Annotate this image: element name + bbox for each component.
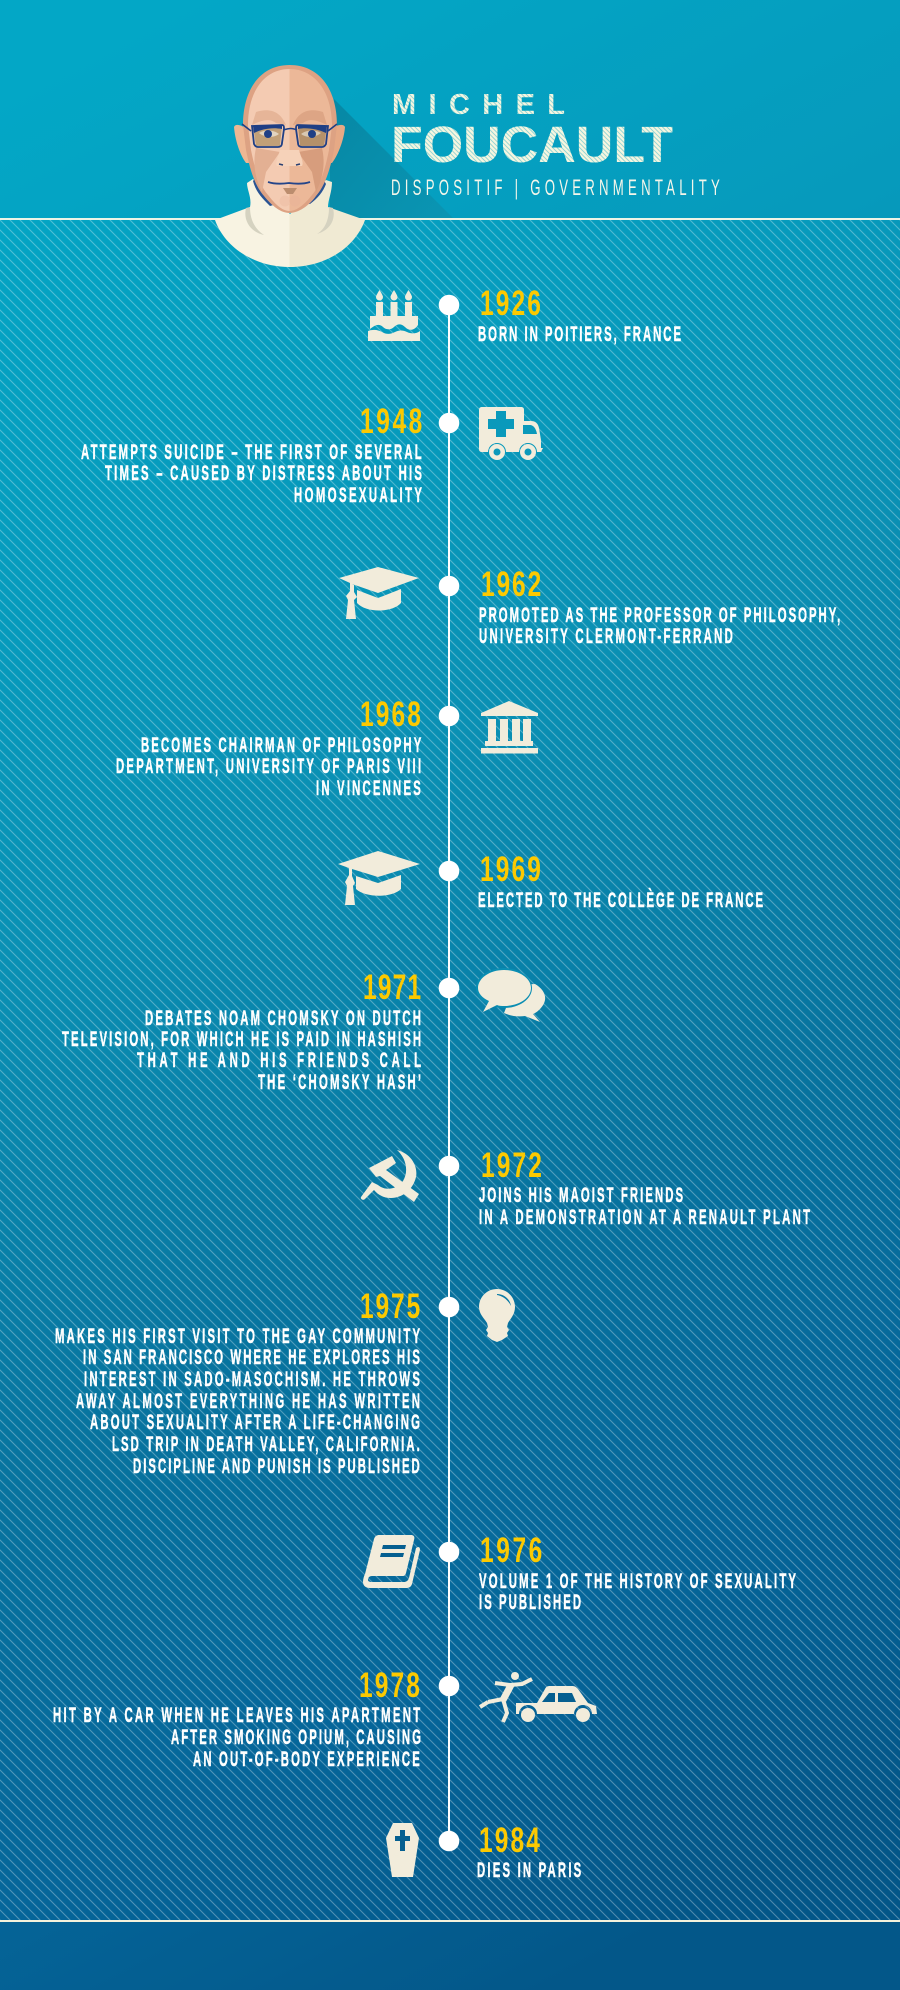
description 1968: DEPARTMENT, UNIVERSITY OF PARIS VIII [116, 754, 421, 778]
subtitle: DISPOSITIF | GOVERNMENTALITY [391, 176, 720, 200]
description 1962: UNIVERSITY CLERMONT-FERRAND [479, 624, 733, 648]
description 1969: ELECTED TO THE COLLÈGE DE FRANCE [478, 888, 763, 912]
description 1972: IN A DEMONSTRATION AT A RENAULT PLANT [479, 1205, 810, 1229]
year 1984: 1984 [479, 1822, 540, 1860]
long shadow of portrait [330, 99, 453, 218]
description 1971: THAT HE AND HIS FRIENDS CALL [137, 1048, 421, 1072]
description 1971: DEBATES NOAM CHOMSKY ON DUTCH [145, 1006, 421, 1030]
year 1975: 1975 [360, 1288, 420, 1326]
footer divider line [0, 1920, 900, 1922]
icon: classical building [481, 701, 538, 754]
description 1975: LSD TRIP IN DEATH VALLEY, CALIFORNIA. [112, 1432, 420, 1456]
icon: hammer and sickle [361, 1150, 419, 1202]
year 1978: 1978 [359, 1667, 420, 1705]
icon: graduation cap [338, 851, 420, 905]
year 1972: 1972 [481, 1147, 542, 1185]
description 1975: MAKES HIS FIRST VISIT TO THE GAY COMMUNITY [55, 1324, 420, 1348]
portrait: Michel Foucault [215, 65, 365, 267]
year 1962: 1962 [481, 566, 541, 604]
title [391, 89, 720, 200]
year 1976: 1976 [480, 1532, 542, 1570]
icon: coffin [386, 1823, 419, 1877]
event 1984 [386, 1822, 581, 1882]
description 1972 [479, 1183, 810, 1229]
description 1948 [81, 440, 422, 507]
nostrils [279, 164, 300, 165]
event 1968 [116, 696, 538, 800]
title: surname: FOUCAULT [391, 116, 673, 173]
year 1926: 1926 [480, 285, 541, 323]
description 1976: IS PUBLISHED [479, 1590, 581, 1614]
event 1978 [53, 1667, 597, 1771]
description 1978: AN OUT-OF-BODY EXPERIENCE [193, 1747, 420, 1771]
event 1976 [363, 1532, 796, 1614]
description 1984: DIES IN PARIS [477, 1858, 581, 1882]
description 1978: AFTER SMOKING OPIUM, CAUSING [171, 1725, 421, 1749]
description 1976: VOLUME 1 OF THE HISTORY OF SEXUALITY [479, 1569, 796, 1593]
description 1975: ABOUT SEXUALITY AFTER A LIFE-CHANGING [90, 1410, 420, 1434]
timeline vertical line [448, 305, 450, 1841]
ears [234, 125, 252, 163]
description 1948: ATTEMPTS SUICIDE – THE FIRST OF SEVERAL [81, 440, 422, 464]
year 1969: 1969 [480, 851, 541, 889]
description 1962 [479, 603, 840, 648]
chin [280, 188, 300, 206]
icon: light bulb [479, 1289, 515, 1342]
icon: graduation cap [339, 567, 419, 619]
title: first name: MICHEL [392, 89, 565, 121]
icon: book [363, 1535, 420, 1588]
event 1972 [361, 1147, 810, 1229]
icon: ambulance [479, 407, 543, 460]
event 1971 [62, 968, 545, 1094]
description 1975: INTEREST IN SADO-MASOCHISM. HE THROWS [84, 1367, 420, 1391]
event 1962 [339, 566, 840, 648]
year 1971: 1971 [363, 969, 421, 1007]
glasses [242, 124, 337, 147]
description 1968: BECOMES CHAIRMAN OF PHILOSOPHY [141, 733, 421, 757]
event 1926 [368, 285, 681, 346]
description 1968: IN VINCENNES [316, 776, 421, 800]
description 1972: JOINS HIS MAOIST FRIENDS [479, 1183, 683, 1207]
event 1975 [55, 1288, 515, 1478]
description 1971: TELEVISION, FOR WHICH HE IS PAID IN HASHISH [62, 1027, 421, 1051]
event 1948 [81, 403, 543, 507]
description 1976 [479, 1569, 796, 1614]
description 1948: TIMES – CAUSED BY DISTRESS ABOUT HIS [105, 461, 422, 485]
timeline dots [439, 295, 459, 1851]
icon: person hit by car [480, 1672, 597, 1722]
year 1968: 1968 [360, 696, 421, 734]
description 1971 [62, 1006, 421, 1094]
description 1971: THE ‘CHOMSKY HASH’ [258, 1070, 421, 1094]
description 1978: HIT BY A CAR WHEN HE LEAVES HIS APARTMENT [53, 1703, 421, 1727]
description 1975: DISCIPLINE AND PUNISH IS PUBLISHED [133, 1454, 420, 1478]
description 1975: IN SAN FRANCISCO WHERE HE EXPLORES HIS [83, 1345, 420, 1369]
head [243, 65, 337, 213]
description 1978 [53, 1703, 421, 1771]
header divider line [0, 218, 900, 220]
description 1962: PROMOTED AS THE PROFESSOR OF PHILOSOPHY, [479, 603, 840, 627]
footer band [0, 1922, 900, 1990]
icon: birthday cake [368, 290, 420, 341]
description 1968 [116, 733, 421, 800]
description 1948: HOMOSEXUALITY [294, 483, 422, 507]
year 1948: 1948 [360, 403, 422, 441]
icon: speech bubbles [476, 968, 545, 1022]
description 1975: AWAY ALMOST EVERYTHING HE HAS WRITTEN [76, 1389, 420, 1413]
description 1926: BORN IN POITIERS, FRANCE [478, 322, 681, 346]
event 1969 [338, 851, 763, 912]
description 1975 [55, 1324, 420, 1478]
bust with turtleneck [215, 170, 365, 267]
mouth [268, 182, 310, 184]
